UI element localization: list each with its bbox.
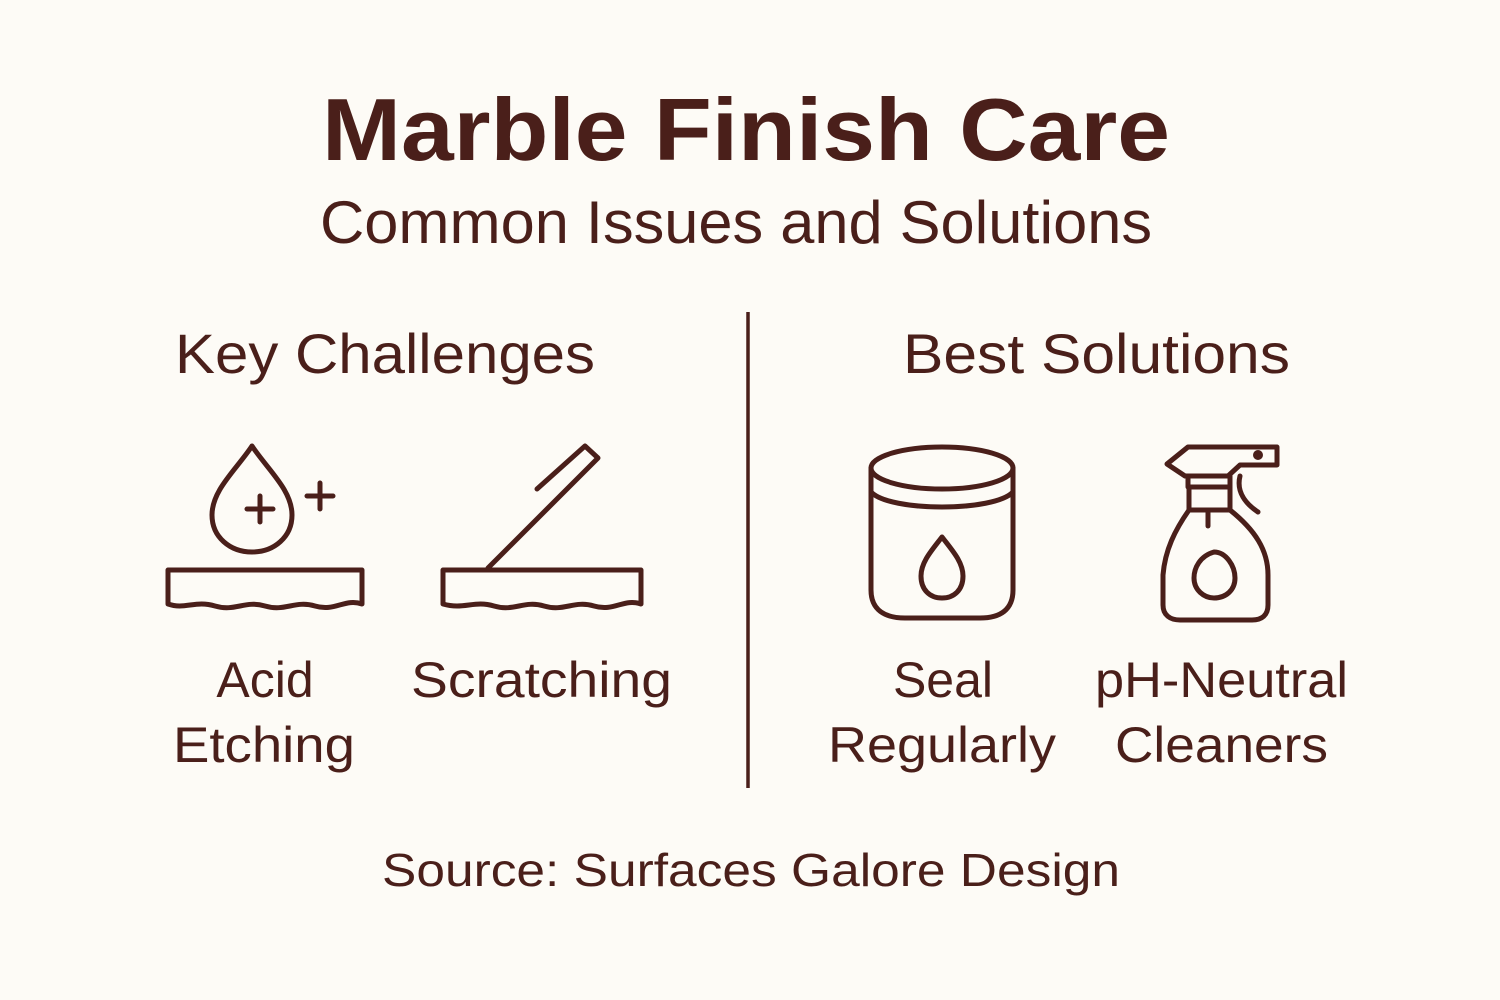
label: acid etching: Acid [216, 652, 314, 708]
icon: spray bottle [1163, 447, 1277, 620]
heading: Best Solutions: Best Solutions [903, 322, 1290, 385]
icon: sealer jar [871, 447, 1013, 618]
icon: scratching [443, 446, 641, 608]
label: pH-neutral cleaners [1095, 652, 1348, 773]
label: pH-neutral cleaners: Cleaners [1115, 717, 1328, 773]
source: Source: Surfaces Galore Design [382, 844, 1120, 896]
heading: Key Challenges: Key Challenges [175, 322, 595, 385]
label: seal regularly [828, 652, 1056, 773]
label: acid etching [173, 652, 355, 773]
subtitle: Common Issues and Solutions [320, 189, 1152, 256]
label: pH-neutral cleaners: pH-Neutral [1095, 652, 1348, 708]
label: seal regularly: Seal [893, 652, 993, 708]
label: scratching: Scratching [411, 652, 672, 708]
label: seal regularly: Regularly [828, 717, 1056, 773]
icon: acid etching [168, 446, 362, 608]
title: Marble Finish Care [322, 80, 1170, 179]
label: acid etching: Etching [173, 717, 355, 773]
